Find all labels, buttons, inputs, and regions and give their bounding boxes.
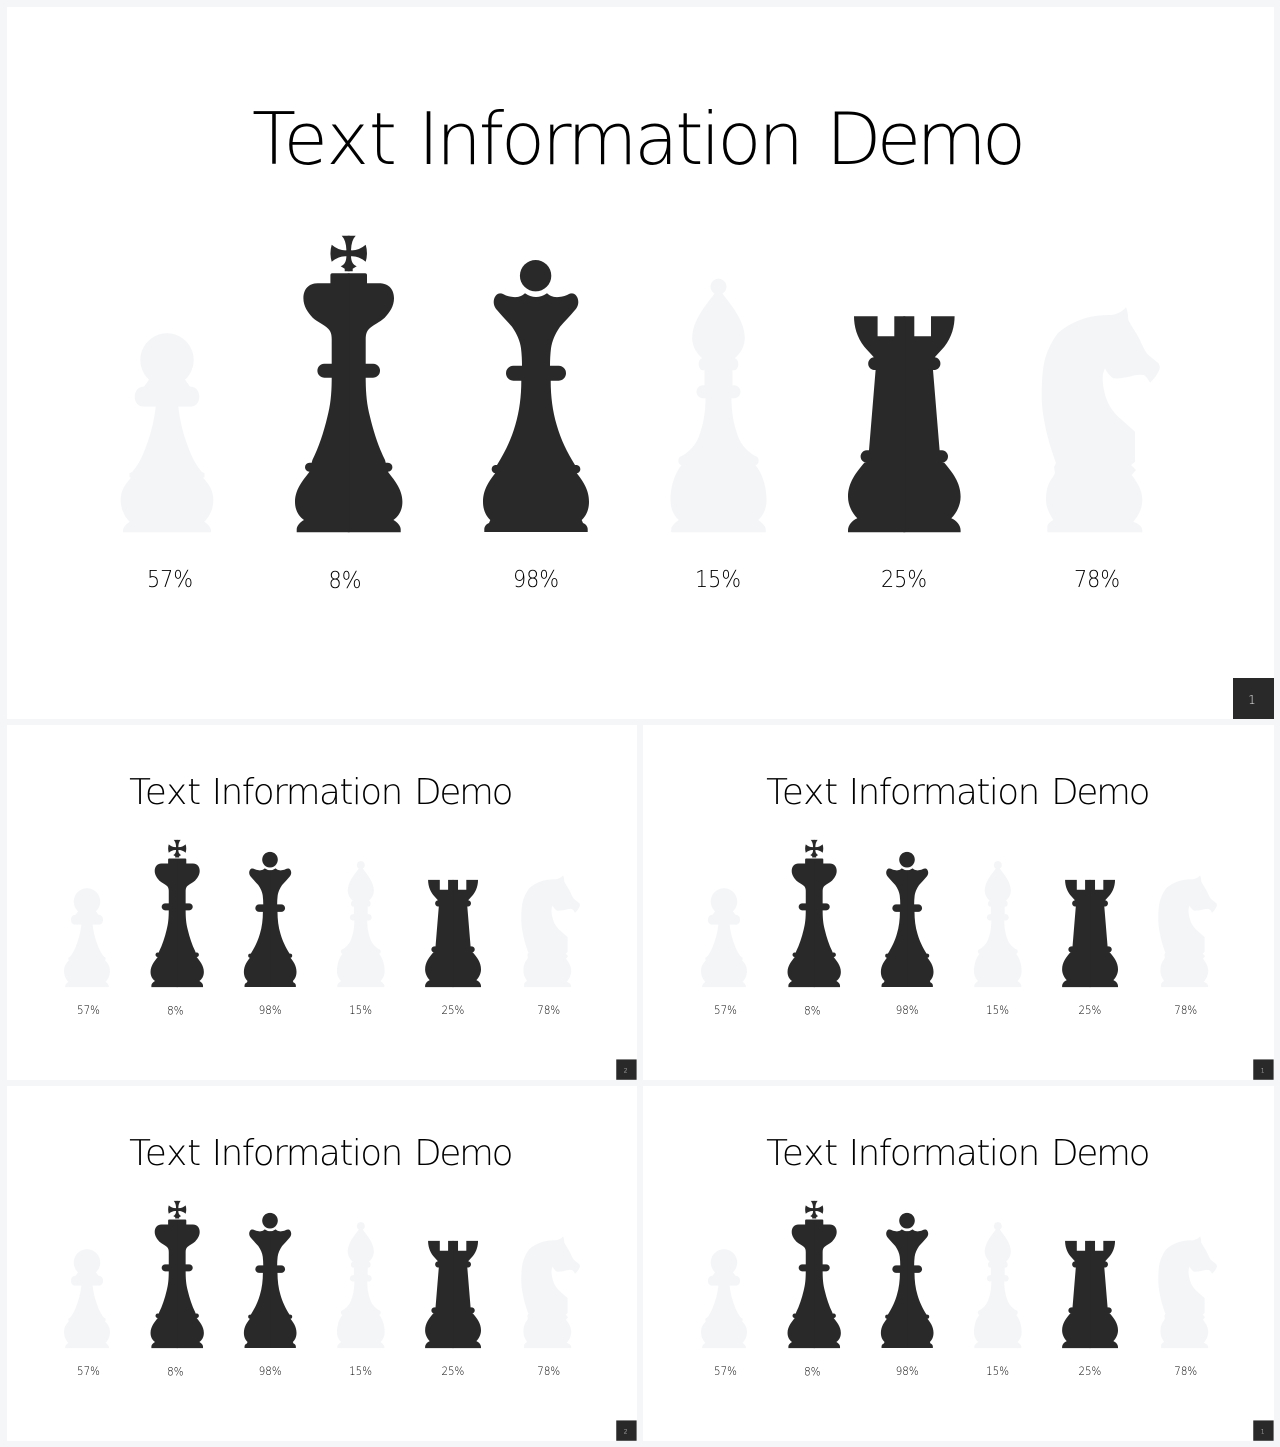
title: Text bbox=[129, 1133, 201, 1174]
panel: slide bottom right bbox=[643, 1086, 1274, 1441]
slide card bbox=[643, 725, 1274, 1080]
label: bishop percent: 15% bbox=[349, 1364, 372, 1378]
icon: king bbox=[295, 236, 402, 532]
page number badge: 1 bbox=[1261, 1067, 1265, 1074]
slide content bbox=[64, 1133, 637, 1441]
icon: bishop bbox=[974, 1222, 1022, 1348]
icon: bishop bbox=[670, 279, 766, 532]
icon: rook bbox=[848, 316, 961, 532]
icon: queen bbox=[483, 260, 589, 532]
label: king percent: 8% bbox=[167, 1365, 184, 1379]
title: Text bbox=[766, 772, 838, 813]
page number badge bbox=[616, 1420, 637, 1441]
icon: pawn bbox=[64, 888, 110, 987]
label: king percent: 8% bbox=[328, 566, 362, 594]
slide content bbox=[701, 1133, 1274, 1441]
label: pawn percent: 57% bbox=[714, 1003, 737, 1017]
icon: pawn bbox=[701, 888, 747, 987]
label: queen percent: 98% bbox=[896, 1003, 919, 1017]
label: bishop percent: 15% bbox=[349, 1003, 372, 1017]
icon: rook bbox=[1062, 880, 1118, 987]
label: bishop percent: 15% bbox=[986, 1003, 1009, 1017]
title: Information bbox=[849, 772, 1040, 813]
page number badge bbox=[1253, 1420, 1274, 1441]
label: pawn percent: 57% bbox=[77, 1364, 100, 1378]
icon: rook bbox=[425, 1241, 481, 1348]
page number badge: 2 bbox=[624, 1428, 628, 1435]
label: rook percent: 25% bbox=[1078, 1003, 1101, 1017]
label: rook percent: 25% bbox=[441, 1364, 464, 1378]
icon: pawn bbox=[701, 1249, 747, 1348]
label: knight percent: 78% bbox=[537, 1364, 560, 1378]
title: Information bbox=[212, 1133, 403, 1174]
icon: king bbox=[151, 840, 204, 987]
icon: bishop bbox=[337, 861, 385, 987]
label: bishop percent: 15% bbox=[695, 565, 741, 593]
title: Text bbox=[766, 1133, 838, 1174]
panel: main slide bbox=[7, 7, 1274, 719]
icon: bishop bbox=[974, 861, 1022, 987]
title: Demo bbox=[1051, 1133, 1150, 1174]
slide card bbox=[643, 1086, 1274, 1441]
icon: knight bbox=[1042, 307, 1160, 532]
slide card bbox=[7, 725, 637, 1080]
icon: knight bbox=[521, 875, 580, 987]
label: queen percent: 98% bbox=[259, 1364, 282, 1378]
label: rook percent: 25% bbox=[441, 1003, 464, 1017]
slide content bbox=[701, 772, 1274, 1080]
label: queen percent: 98% bbox=[259, 1003, 282, 1017]
label: knight percent: 78% bbox=[537, 1003, 560, 1017]
title: Information bbox=[212, 772, 403, 813]
page number badge: 2 bbox=[624, 1067, 628, 1074]
label: knight percent: 78% bbox=[1174, 1364, 1197, 1378]
title: Text bbox=[129, 772, 201, 813]
title: Text bbox=[252, 97, 397, 181]
icon: knight bbox=[1158, 875, 1217, 987]
title: Information bbox=[418, 97, 804, 181]
page number badge bbox=[616, 1059, 637, 1080]
slide card bbox=[7, 1086, 637, 1441]
label: king percent: 8% bbox=[804, 1365, 821, 1379]
label: king percent: 8% bbox=[804, 1004, 821, 1018]
icon: rook bbox=[425, 880, 481, 987]
label: knight percent: 78% bbox=[1174, 1003, 1197, 1017]
panel: slide bottom left bbox=[7, 1086, 637, 1441]
title: Demo bbox=[414, 772, 513, 813]
icon: knight bbox=[521, 1236, 580, 1348]
icon: queen bbox=[881, 852, 934, 987]
icon: pawn bbox=[64, 1249, 110, 1348]
icon: queen bbox=[244, 852, 297, 987]
page number badge: 1 bbox=[1248, 693, 1256, 707]
icon: bishop bbox=[337, 1222, 385, 1348]
label: bishop percent: 15% bbox=[986, 1364, 1009, 1378]
label: rook percent: 25% bbox=[1078, 1364, 1101, 1378]
icon: king bbox=[788, 840, 841, 987]
label: queen percent: 98% bbox=[896, 1364, 919, 1378]
title: Demo bbox=[414, 1133, 513, 1174]
label: pawn percent: 57% bbox=[77, 1003, 100, 1017]
slide content bbox=[64, 772, 637, 1080]
icon: rook bbox=[1062, 1241, 1118, 1348]
icon: king bbox=[151, 1201, 204, 1348]
panel: slide top right bbox=[643, 725, 1274, 1080]
icon: queen bbox=[881, 1213, 934, 1348]
label: rook percent: 25% bbox=[881, 565, 927, 593]
icon: queen bbox=[244, 1213, 297, 1348]
title: Demo bbox=[1051, 772, 1150, 813]
icon: knight bbox=[1158, 1236, 1217, 1348]
slide card bbox=[7, 7, 1274, 719]
page number badge bbox=[1233, 678, 1274, 719]
label: knight percent: 78% bbox=[1074, 565, 1120, 593]
icon: pawn bbox=[121, 333, 213, 532]
label: pawn percent: 57% bbox=[147, 565, 193, 593]
icon: king bbox=[788, 1201, 841, 1348]
label: queen percent: 98% bbox=[513, 565, 559, 593]
title: Information bbox=[849, 1133, 1040, 1174]
panel: slide top left bbox=[7, 725, 637, 1080]
page number badge bbox=[1253, 1059, 1274, 1080]
page number badge: 1 bbox=[1261, 1428, 1265, 1435]
label: king percent: 8% bbox=[167, 1004, 184, 1018]
title: Demo bbox=[826, 97, 1026, 181]
label: pawn percent: 57% bbox=[714, 1364, 737, 1378]
